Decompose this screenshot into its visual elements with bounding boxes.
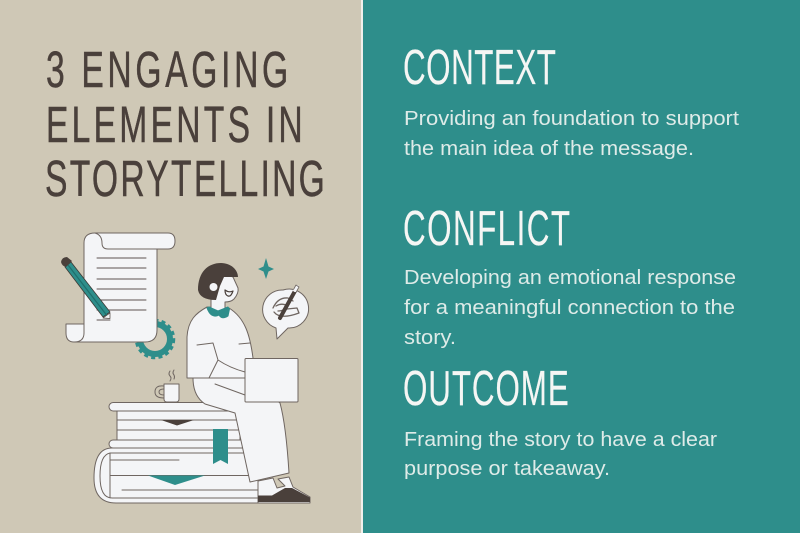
- hair: [198, 263, 238, 300]
- section: conflict: Developing an emotional response: [404, 267, 736, 289]
- icon: bookmark: [213, 429, 228, 464]
- legs: [193, 378, 289, 482]
- torso: [187, 307, 253, 378]
- ear: [210, 283, 218, 291]
- section: context: the main idea of the message.: [404, 138, 694, 160]
- section: outcome: [403, 361, 717, 480]
- section: outcome: OUTCOME: [403, 361, 569, 416]
- title: 3 ENGAGING: [46, 42, 288, 99]
- icon: laptop: [245, 358, 298, 402]
- section: context: [403, 40, 739, 160]
- section: outcome: Framing the story to have a clear: [404, 429, 717, 451]
- section: conflict: story.: [404, 327, 456, 349]
- icon: gear: [136, 320, 174, 358]
- panel: teal background: [363, 0, 800, 533]
- divider strip: [361, 0, 363, 533]
- smile: [225, 290, 233, 296]
- section: conflict: CONFLICT: [403, 201, 570, 256]
- icon: speech bubble with hand and pen: [263, 285, 309, 339]
- icon: coffee mug: [155, 370, 179, 402]
- title: ELEMENTS IN: [46, 97, 303, 154]
- icon: dark page marker: [161, 420, 194, 426]
- icon: sparkle: [258, 258, 274, 279]
- icon: pencil: [61, 257, 110, 318]
- shoes: [258, 477, 310, 503]
- title: [45, 42, 325, 208]
- icon: teal page marker: [148, 476, 205, 485]
- panel: beige background: [0, 0, 361, 533]
- figure: person: [187, 263, 310, 503]
- section: conflict: for a meaningful connection to the: [404, 297, 735, 319]
- title: STORYTELLING: [45, 151, 325, 208]
- icon: paper scroll: [66, 233, 175, 342]
- icon: book stack: [94, 402, 259, 503]
- collar: [207, 307, 230, 318]
- section: context: CONTEXT: [403, 40, 556, 95]
- neck and face: [211, 272, 238, 313]
- section: outcome: purpose or takeaway.: [404, 458, 610, 480]
- section: context: Providing an foundation to support: [404, 108, 739, 130]
- illustration: storyteller: [61, 233, 310, 503]
- section: conflict: [403, 201, 736, 349]
